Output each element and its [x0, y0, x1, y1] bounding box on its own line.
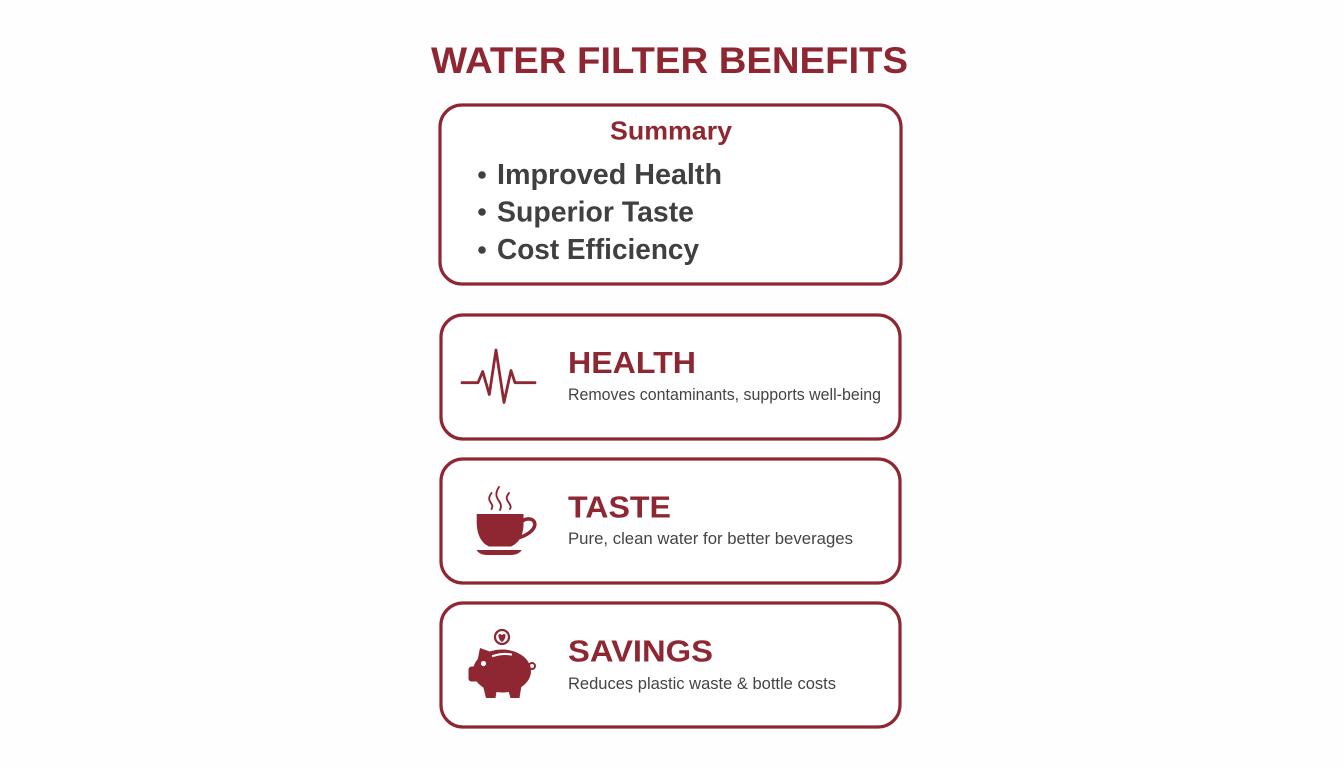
- health description: Removes contaminants, supports well-being: [568, 385, 881, 404]
- summary heading: Summary: [610, 116, 733, 146]
- icon: coffee cup: [477, 487, 535, 555]
- summary list: Improved Health: [497, 159, 722, 191]
- panel: summary: [440, 105, 901, 284]
- taste heading: TASTE: [568, 490, 671, 524]
- panel: health: [441, 315, 900, 439]
- savings heading: SAVINGS: [568, 634, 713, 668]
- panel: savings: [441, 603, 900, 727]
- summary list: Superior Taste: [497, 196, 694, 228]
- taste description: Pure, clean water for better beverages: [568, 529, 853, 548]
- title: WATER FILTER BENEFITS: [431, 40, 908, 81]
- summary list: [478, 159, 722, 266]
- summary list: Cost Efficiency: [497, 234, 699, 266]
- icon: piggy bank: [468, 630, 535, 698]
- health heading: HEALTH: [568, 345, 696, 380]
- savings description: Reduces plastic waste & bottle costs: [568, 674, 836, 693]
- icon: heartbeat: [462, 350, 535, 402]
- panel: taste: [441, 459, 900, 583]
